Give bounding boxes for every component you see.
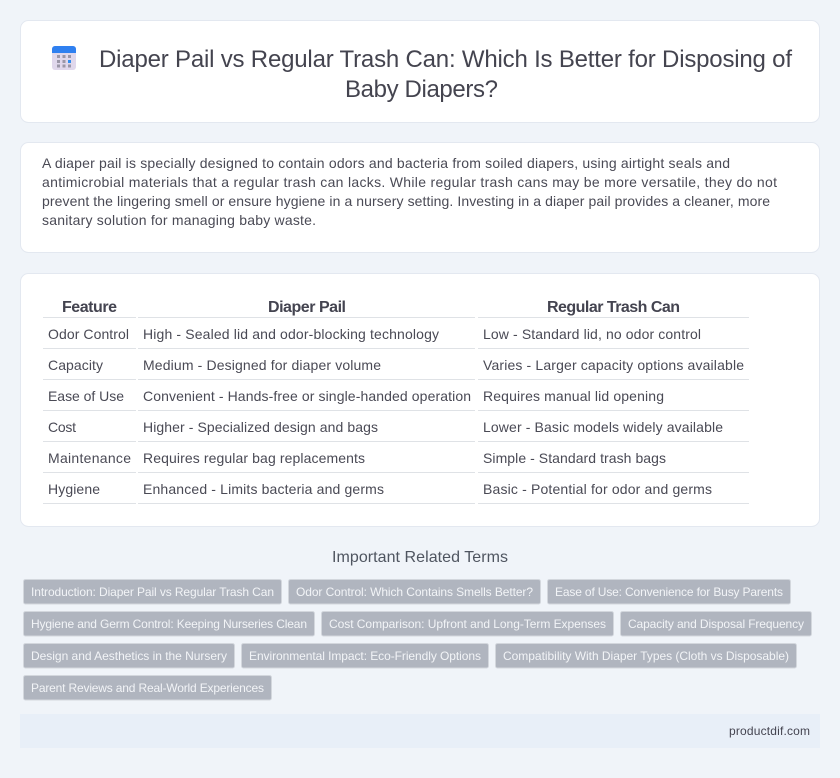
table header: Feature: [62, 299, 117, 316]
row: maintenance: Simple - Standard trash bags: [483, 450, 666, 466]
row: cost: Lower - Basic models widely available: [483, 419, 723, 435]
row: ease of use: Convenient - Hands-free or single-handed operation: [143, 388, 471, 404]
text block: intro paragraph: sanitary solution for managing baby waste.: [42, 212, 316, 228]
row: capacity: Varies - Larger capacity options available: [483, 357, 744, 373]
footer: [20, 714, 820, 748]
row: capacity: [48, 357, 744, 373]
row: maintenance: Requires regular bag replacements: [143, 450, 365, 466]
tag: [548, 580, 790, 604]
tag: Environmental Impact: Eco-Friendly Options: [249, 649, 481, 663]
row: ease of use: Ease of Use: [48, 388, 124, 404]
title: [99, 46, 792, 103]
tag: Introduction: Diaper Pail vs Regular Trash Can: [31, 585, 274, 599]
tag: Odor Control: Which Contains Smells Better?: [296, 585, 533, 599]
tag: [620, 612, 812, 636]
tag: [24, 612, 314, 636]
tag: [496, 644, 796, 668]
tag: Parent Reviews and Real-World Experiences: [31, 681, 264, 695]
row: capacity: Capacity: [48, 357, 103, 373]
table header: Regular Trash Can: [547, 299, 680, 316]
row: capacity: Medium - Designed for diaper volume: [143, 357, 381, 373]
tag: Design and Aesthetics in the Nursery: [31, 649, 227, 663]
row: cost: Higher - Specialized design and bags: [143, 419, 378, 435]
tag: Ease of Use: Convenience for Busy Parents: [555, 585, 783, 599]
row: maintenance: [48, 450, 666, 466]
row: ease of use: Requires manual lid opening: [483, 388, 664, 404]
row: hygiene: Enhanced - Limits bacteria and germs: [143, 481, 384, 497]
tag: [24, 676, 272, 700]
tag: Cost Comparison: Upfront and Long-Term Expenses: [329, 617, 606, 631]
row: odor control: Low - Standard lid, no odor control: [483, 326, 701, 342]
heading: related terms: Important Related Terms: [332, 549, 508, 566]
text block: intro paragraph: A diaper pail is specially designed to contain odors and bacteria from soiled diapers, using airtight seals and: [42, 155, 730, 171]
row: odor control: High - Sealed lid and odor-blocking technology: [143, 326, 439, 342]
row: hygiene: Hygiene: [48, 481, 100, 497]
panel: comparison table: [20, 274, 820, 526]
tag: [24, 644, 234, 668]
table header: Diaper Pail: [268, 299, 346, 316]
table header: [62, 299, 680, 316]
tag: [242, 644, 488, 668]
tag: [322, 612, 614, 636]
text block: intro paragraph: [42, 155, 777, 228]
panel: header: [20, 20, 820, 122]
row: hygiene: Basic - Potential for odor and germs: [483, 481, 712, 497]
row: odor control: Odor Control: [48, 326, 129, 342]
row: hygiene: [48, 481, 712, 497]
row: cost: Cost: [48, 419, 76, 435]
row: ease of use: [48, 388, 664, 404]
title: Baby Diapers?: [345, 76, 498, 103]
footer source: productdif.com: [729, 724, 810, 738]
icon: calendar: [52, 46, 76, 70]
text block: intro paragraph: antimicrobial materials that a regular trash can lacks. While regular trash cans may be more versatile, they do not: [42, 174, 777, 190]
row: odor control: [48, 326, 701, 342]
panel: intro: [20, 142, 820, 252]
text block: intro paragraph: prevent the lingering smell or ensure hygiene in a nursery setting. Investing in a diaper pail provides a cleaner, more: [42, 193, 770, 209]
related term tags: [24, 580, 812, 700]
title: Diaper Pail vs Regular Trash Can: Which Is Better for Disposing of: [99, 46, 792, 73]
tag: [288, 580, 540, 604]
row: cost: [48, 419, 723, 435]
tag: Compatibility With Diaper Types (Cloth vs Disposable): [503, 649, 789, 663]
tag: [24, 580, 282, 604]
tag: Hygiene and Germ Control: Keeping Nurseries Clean: [31, 617, 307, 631]
tag: Capacity and Disposal Frequency: [628, 617, 804, 631]
row: maintenance: Maintenance: [48, 450, 131, 466]
